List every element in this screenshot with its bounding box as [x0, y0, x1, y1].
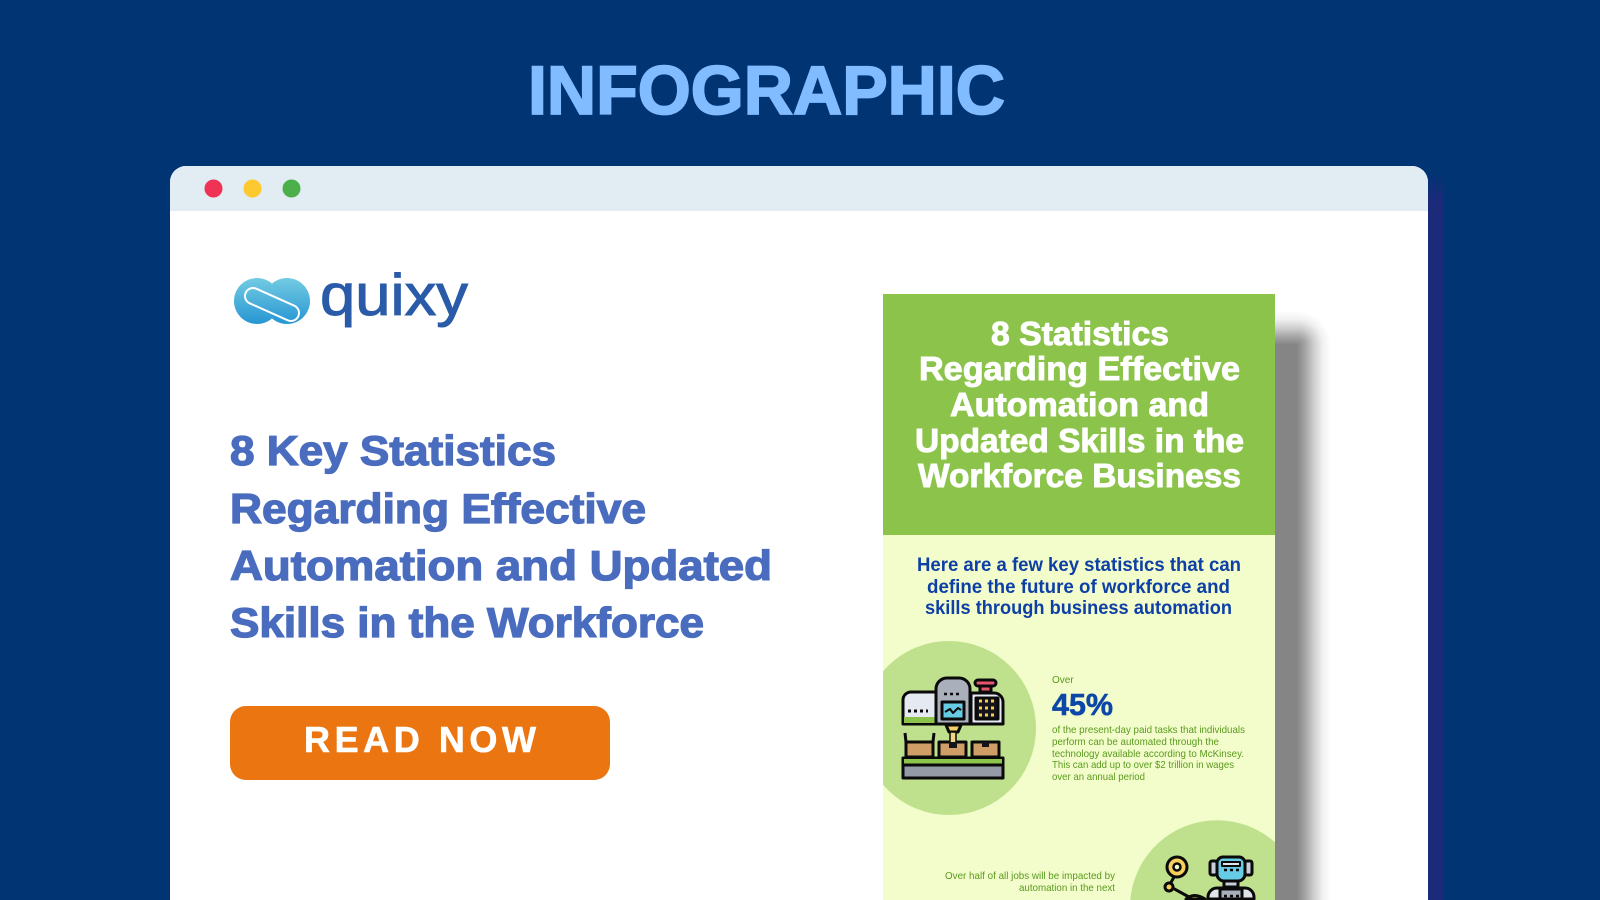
headline: 8 Key Statistics: [230, 427, 556, 474]
icon: factory machine: [903, 678, 1003, 778]
logo wordmark: quixy: [320, 263, 468, 328]
panel header: [883, 294, 1275, 535]
circle: first stat: [883, 641, 1036, 815]
headline: Regarding Effective: [230, 485, 646, 532]
stat number: 45%: [1052, 687, 1113, 722]
second stat text: [946, 872, 1115, 891]
panel header: Regarding Effective: [919, 350, 1240, 387]
headline: [230, 427, 772, 646]
panel header: 8 Statistics: [991, 315, 1169, 352]
green dot: [282, 180, 300, 198]
panel shadow: [1275, 311, 1331, 900]
logo: quixy: [234, 263, 468, 328]
stat description: technology available according to McKinsey.: [1052, 748, 1244, 760]
infographic preview panel: [883, 294, 1275, 900]
panel header: Automation and: [950, 386, 1209, 423]
red dot: [204, 180, 222, 198]
panel intro text: skills through business automation: [925, 597, 1232, 619]
logo icon: [234, 278, 310, 324]
browser title bar: [170, 166, 1428, 211]
second stat text: Over half of all jobs will be impacted by: [945, 870, 1116, 882]
browser window: [170, 166, 1444, 900]
stat description: This can add up to over $2 trillion in wages: [1052, 759, 1234, 771]
panel intro text: Here are a few key statistics that can: [917, 554, 1241, 576]
icon: robot: [1165, 857, 1254, 899]
circle: second stat: [1130, 820, 1275, 900]
panel header: Workforce Business: [918, 457, 1241, 494]
yellow dot: [244, 180, 262, 198]
headline: Automation and Updated: [230, 542, 772, 589]
panel header: Updated Skills in the: [915, 422, 1244, 459]
headline: Skills in the Workforce: [230, 599, 704, 646]
panel intro text: [917, 554, 1241, 619]
second stat text: automation in the next: [1019, 882, 1115, 894]
first stat text: [1052, 675, 1245, 783]
stat description: [1052, 724, 1245, 783]
stat description: perform can be automated through the: [1052, 736, 1219, 748]
button: read now: [230, 706, 610, 780]
button: read now: READ NOW: [304, 719, 536, 760]
first stat text: Over: [1052, 675, 1074, 686]
title: INFOGRAPHIC: [528, 52, 1005, 129]
panel intro text: define the future of workforce and: [927, 576, 1230, 598]
stat description: of the present-day paid tasks that individuals: [1052, 724, 1245, 736]
stat description: over an annual period: [1052, 771, 1145, 783]
